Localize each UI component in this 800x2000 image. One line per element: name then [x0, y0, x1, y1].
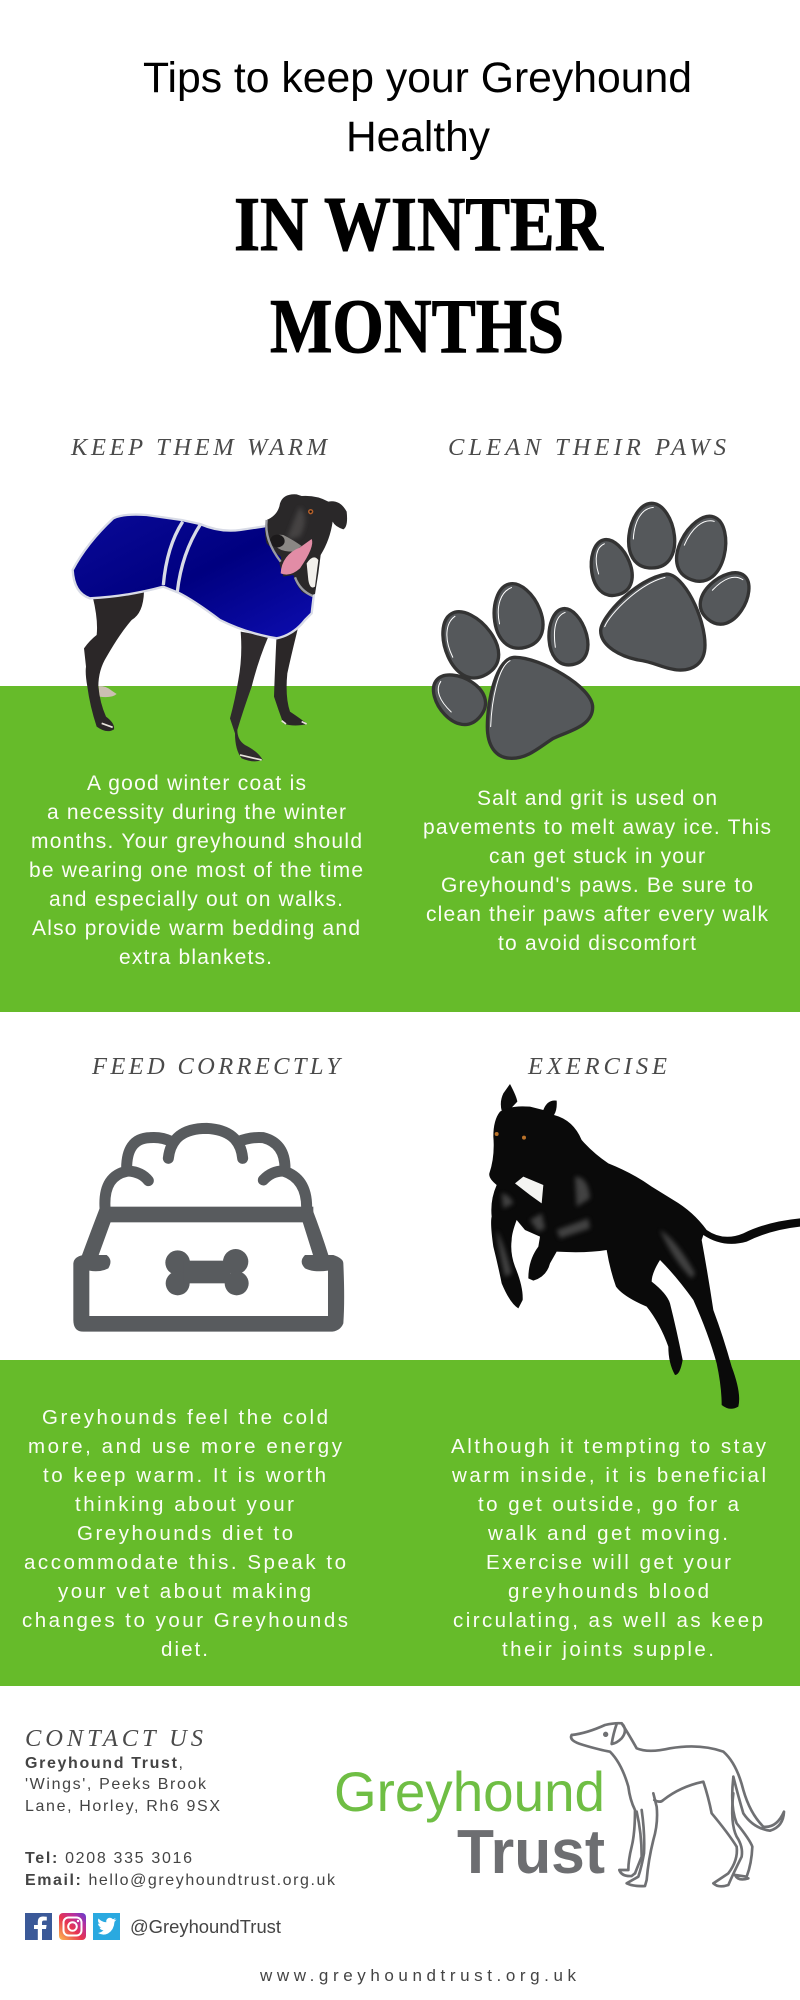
- text: postal address: 'Wings', Peeks Brook: [25, 1776, 207, 1793]
- icon: instagram: [59, 1913, 86, 1940]
- body text: feed correctly: accommodate this. Speak to: [24, 1551, 346, 1574]
- logo wordmark: [334, 1760, 605, 1887]
- text: telephone and email: [25, 1850, 336, 1889]
- green band: upper row: [0, 686, 800, 1012]
- text: telephone and email: Email: hello@greyhoundtrust.org.uk: [25, 1872, 336, 1889]
- body text: exercise: circulating, as well as keep: [453, 1609, 763, 1632]
- body text: exercise: greyhounds blood: [508, 1580, 709, 1603]
- body text: keep them warm: be wearing one most of the time: [29, 859, 363, 882]
- body text: feed correctly: to keep warm. It is worth: [43, 1464, 326, 1487]
- logo wordmark: Greyhound: [334, 1760, 605, 1823]
- body text: feed correctly: Greyhounds diet to: [77, 1522, 293, 1545]
- body text: keep them warm: A good winter coat is: [87, 772, 306, 795]
- icon: two paw prints: [423, 503, 760, 758]
- website address: www.greyhoundtrust.org.uk: [259, 1966, 576, 1985]
- panel: clean their paws: [423, 434, 771, 955]
- heading: contact us: CONTACT US: [25, 1725, 203, 1752]
- panel: exercise: [451, 1053, 800, 1661]
- text: postal address: Lane, Horley, Rh6 9SX: [25, 1798, 220, 1815]
- body text: exercise: walk and get moving.: [487, 1522, 728, 1545]
- body text: clean their paws: Greyhound's paws. Be sure to: [441, 874, 753, 897]
- icon: twitter: [93, 1913, 120, 1940]
- title: main heading: [234, 181, 604, 369]
- title: subtitle lines: Healthy: [346, 113, 491, 161]
- logo greyhound line drawing: [571, 1723, 784, 1886]
- icon: dog food bowl with bone: [73, 1128, 344, 1332]
- body text: feed correctly: thinking about your: [75, 1493, 294, 1516]
- panel: feed correctly: [22, 1053, 348, 1661]
- body text: keep them warm: [29, 772, 363, 969]
- green band: lower row: [0, 1360, 800, 1686]
- body text: keep them warm: months. Your greyhound should: [31, 830, 362, 853]
- body text: feed correctly: [22, 1406, 348, 1661]
- body text: exercise: [451, 1435, 767, 1661]
- logo wordmark: Trust: [457, 1818, 605, 1887]
- body text: keep them warm: a necessity during the winter: [47, 801, 346, 824]
- illustration: leaping black greyhound: [489, 1084, 800, 1409]
- text: social handle: @GreyhoundTrust: [130, 1917, 281, 1937]
- body text: exercise: to get outside, go for a: [478, 1493, 740, 1516]
- body text: exercise: Although it tempting to stay: [451, 1435, 767, 1458]
- illustration: greyhound wearing blue coat: [73, 494, 347, 761]
- text: telephone and email: Tel: 0208 335 3016: [25, 1850, 192, 1867]
- body text: feed correctly: changes to your Greyhounds: [22, 1609, 348, 1632]
- logo: Greyhound Trust: [334, 1723, 784, 1887]
- body text: clean their paws: can get stuck in your: [489, 845, 705, 868]
- heading: feed correctly: FEED CORRECTLY: [91, 1053, 342, 1080]
- icon: facebook: [25, 1913, 52, 1940]
- body text: clean their paws: clean their paws after every walk: [426, 903, 768, 926]
- body text: keep them warm: Also provide warm bedding and: [32, 917, 360, 940]
- text: postal address: Greyhound Trust,: [25, 1755, 183, 1772]
- text: postal address: [25, 1755, 220, 1815]
- title: subtitle lines: [143, 54, 692, 161]
- body text: exercise: Exercise will get your: [486, 1551, 731, 1574]
- title: subtitle lines: Tips to keep your Greyhound: [143, 54, 692, 102]
- body text: feed correctly: Greyhounds feel the cold: [42, 1406, 328, 1429]
- body text: clean their paws: [423, 787, 771, 955]
- body text: clean their paws: pavements to melt away ice. This: [423, 816, 771, 839]
- heading: clean their paws: CLEAN THEIR PAWS: [448, 434, 726, 461]
- panel: contact us: [25, 1725, 336, 1940]
- panel: keep them warm: [29, 434, 363, 969]
- body text: feed correctly: diet.: [161, 1638, 208, 1661]
- body text: clean their paws: Salt and grit is used on: [477, 787, 717, 810]
- body text: feed correctly: more, and use more energy: [28, 1435, 343, 1458]
- title: main heading: MONTHS: [270, 283, 564, 369]
- body text: exercise: their joints supple.: [502, 1638, 714, 1661]
- body text: feed correctly: your vet about making: [58, 1580, 311, 1603]
- heading: keep them warm: KEEP THEM WARM: [70, 434, 329, 461]
- heading: exercise: EXERCISE: [527, 1053, 667, 1080]
- body text: keep them warm: extra blankets.: [119, 946, 272, 969]
- body text: clean their paws: to avoid discomfort: [498, 932, 696, 955]
- body text: keep them warm: and especially out on walks.: [49, 888, 343, 911]
- title: main heading: IN WINTER: [234, 181, 604, 267]
- title: [143, 54, 692, 369]
- body text: exercise: warm inside, it is beneficial: [451, 1464, 766, 1487]
